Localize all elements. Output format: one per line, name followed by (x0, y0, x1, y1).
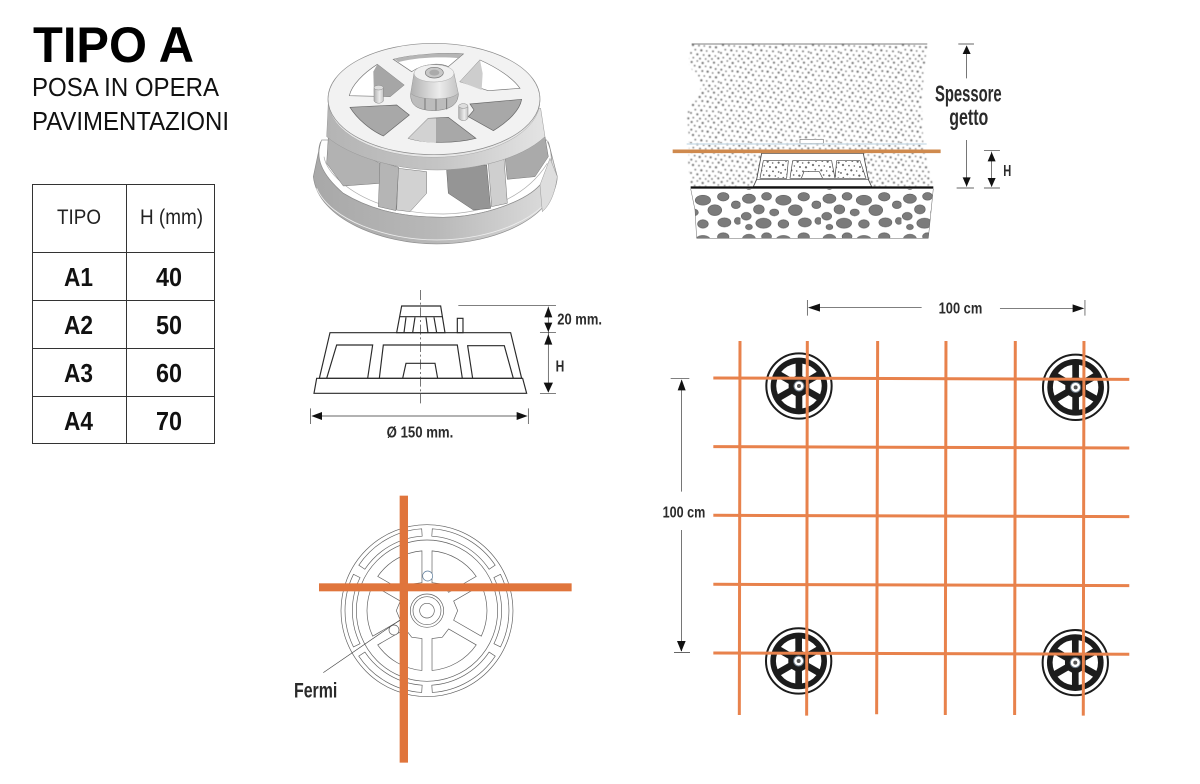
dimension: 100 cm vertical (663, 378, 705, 653)
rebar line (673, 144, 941, 151)
dimension labels (387, 311, 602, 442)
spacer in section (753, 139, 872, 187)
label: spessore getto: Spessore (935, 81, 1002, 107)
title: TIPO A (33, 17, 194, 73)
table: tipo and height: 60 (156, 358, 182, 388)
dimension labels: H (556, 359, 564, 376)
spacer wheels (766, 353, 1108, 695)
height dimensions (311, 305, 556, 424)
table: tipo and height: 40 (156, 262, 182, 292)
dimension arrows (963, 45, 996, 187)
label: spessore getto: getto (949, 104, 988, 130)
table: tipo and height: 70 (156, 406, 182, 436)
dimension arrows (311, 307, 553, 420)
label: fermi (294, 620, 400, 702)
table: tipo and height: A3 (64, 358, 93, 388)
dimension: 100 cm horizontal (807, 300, 1085, 317)
rebar grid plan (663, 300, 1129, 716)
table: tipo and height: H (mm) (140, 206, 203, 229)
rebar cross (319, 496, 572, 763)
top view of spacer with rebar (294, 496, 572, 763)
subtitle: PAVIMENTAZIONI (32, 106, 229, 136)
label: spessore getto: H (1003, 163, 1011, 180)
subtitle (32, 72, 229, 136)
3D view of spacer (313, 43, 557, 244)
rebar bars (713, 341, 1129, 716)
table: tipo and height: TIPO (57, 206, 101, 229)
dimension labels: Ø 150 mm. (387, 425, 453, 442)
label: fermi: Fermi (294, 678, 337, 702)
subtitle: POSA IN OPERA (32, 72, 220, 102)
side elevation with dimensions (311, 290, 602, 442)
section through concrete slab (673, 44, 1011, 238)
table: tipo and height: A4 (64, 406, 93, 436)
dimension: 100 cm horizontal: 100 cm (939, 300, 982, 317)
table: tipo and height (32, 184, 214, 444)
table: tipo and height: 50 (156, 310, 182, 340)
dimension: 100 cm vertical: 100 cm (663, 504, 705, 521)
dimension labels: 20 mm. (557, 311, 602, 328)
table: tipo and height: A2 (64, 310, 93, 340)
dimension: spessore getto (957, 44, 1000, 188)
concrete layer (687, 44, 933, 187)
label: spessore getto (935, 81, 1011, 180)
pebble layer (691, 189, 933, 238)
table: tipo and height: A1 (64, 262, 93, 292)
